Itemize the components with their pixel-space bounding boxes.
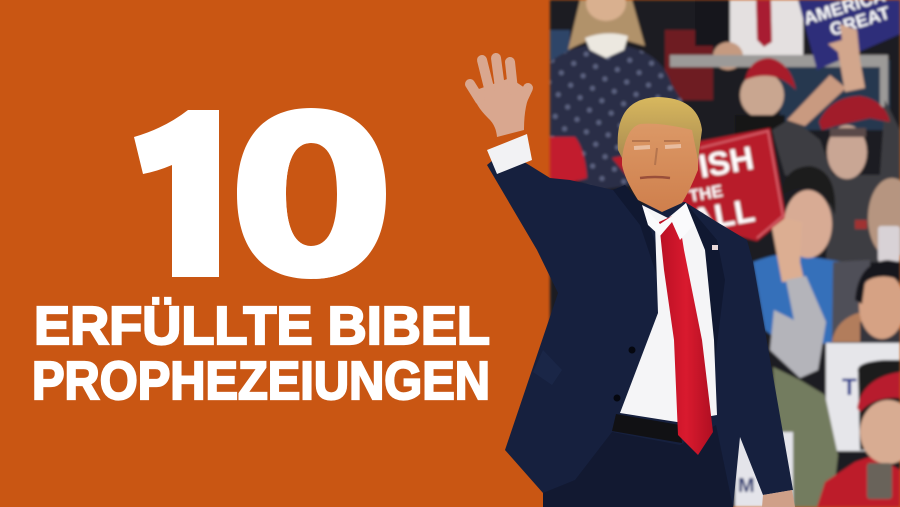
eyes xyxy=(634,146,681,148)
shirt collar xyxy=(642,203,694,240)
eyebrows and nose xyxy=(632,141,680,165)
green jacket spectator xyxy=(773,367,838,507)
heading line two: PROPHEZEIUNGEN xyxy=(32,351,490,411)
child with red cap xyxy=(735,58,796,137)
right spectator in grey raising arms xyxy=(772,24,900,262)
blue sign top right xyxy=(798,0,900,70)
hair xyxy=(618,97,702,160)
heading line one: ERFÜLLTE BIBEL xyxy=(34,296,490,356)
red sign: THE xyxy=(687,181,724,206)
red sign xyxy=(612,128,786,241)
shirt cuff xyxy=(487,134,532,174)
title number xyxy=(134,108,386,279)
spectator girl in dotted sweater xyxy=(550,0,683,190)
red sign: ALL xyxy=(688,191,757,239)
boy at right xyxy=(832,260,900,344)
white sign lower right xyxy=(826,343,900,451)
red tie xyxy=(659,216,713,455)
lapel pin xyxy=(712,245,718,250)
face xyxy=(622,118,698,212)
boy in blue shirt xyxy=(753,166,843,378)
white sign bottom xyxy=(735,432,793,507)
railing xyxy=(670,55,888,107)
red cap at left xyxy=(550,137,587,184)
title number: 10 xyxy=(131,64,387,328)
figure: man in dark suit waving xyxy=(470,58,795,507)
white sign lower right: T xyxy=(842,374,857,401)
right lapel xyxy=(685,202,725,360)
belt xyxy=(612,414,682,443)
panel: crowd photo background xyxy=(550,0,900,507)
red sign: ISH xyxy=(696,139,756,185)
suit jacket xyxy=(487,150,793,507)
trousers xyxy=(543,425,733,507)
blue sign top right: GREAT xyxy=(827,3,892,40)
white shirt xyxy=(620,203,717,422)
mouth xyxy=(640,177,670,178)
white sign bottom: M xyxy=(738,475,755,497)
jacket pocket flap xyxy=(533,350,562,385)
bottom right spectator with phone xyxy=(817,360,900,507)
left lapel xyxy=(613,185,660,285)
jacket buttons xyxy=(614,346,636,402)
bottom hand xyxy=(762,490,795,507)
panel: orange background xyxy=(0,0,551,507)
girl at right with phone xyxy=(868,178,900,262)
waving hand xyxy=(470,58,531,137)
spectator in shirt with red tie xyxy=(695,0,803,70)
